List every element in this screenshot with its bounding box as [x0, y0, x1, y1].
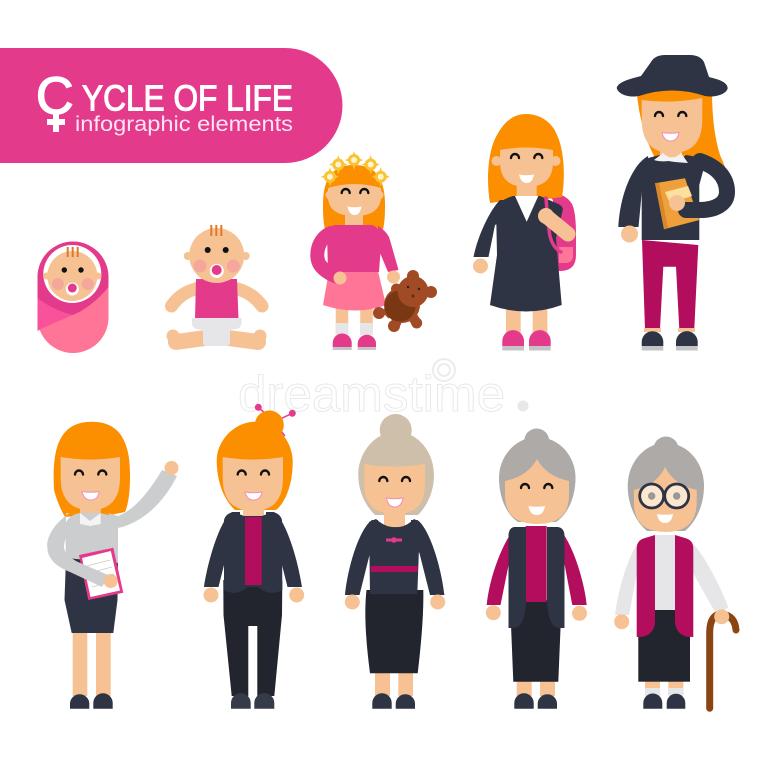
- walking cane: [710, 614, 736, 708]
- necklace: [386, 537, 402, 543]
- figure: teen with hat and book: [617, 55, 728, 350]
- teddy bear: [373, 270, 437, 332]
- figure: little girl: [317, 151, 437, 350]
- figure: older woman in vest: [486, 428, 587, 709]
- figure: schoolgirl with backpack: [473, 114, 576, 350]
- hair pins: [255, 404, 296, 436]
- heading: cycle of life: [36, 68, 293, 132]
- figure: swaddled newborn: [38, 242, 108, 353]
- figure: grandmother with glasses and cane: [614, 436, 736, 709]
- subheading: infographic elements: [75, 113, 293, 136]
- hair: [636, 90, 728, 175]
- book: [655, 178, 699, 229]
- backpack: [539, 190, 576, 271]
- clipboard: [79, 548, 123, 600]
- title banner: [0, 48, 342, 163]
- figure: sitting baby: [166, 225, 266, 346]
- glasses: [640, 484, 689, 508]
- figure: businesswoman with hair bun: [204, 404, 304, 709]
- figure: middle-aged woman in dress: [345, 414, 445, 709]
- watermark: dreamstime: [238, 366, 505, 422]
- figure: working woman with clipboard: [47, 422, 178, 709]
- heading: cycle of life: C: [36, 68, 74, 126]
- flower wreath: [321, 151, 390, 187]
- hat: [617, 55, 728, 97]
- heading: cycle of life: YCLE OF LIFE: [82, 78, 293, 118]
